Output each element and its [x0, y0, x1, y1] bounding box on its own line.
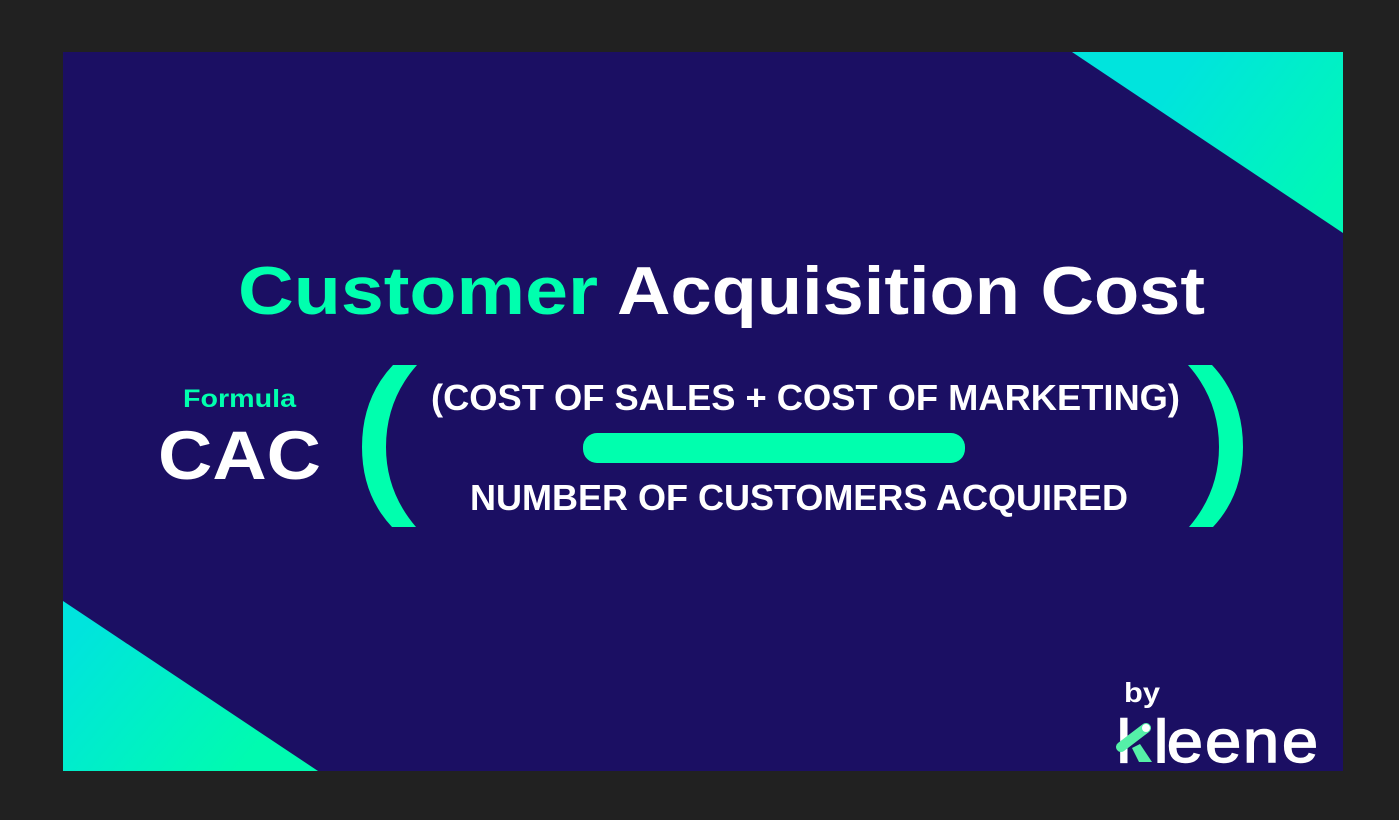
left bracket: [362, 365, 417, 527]
formula label: Formula: [183, 385, 297, 413]
decorative triangle: top right: [1072, 52, 1343, 233]
title: [238, 253, 1205, 329]
by label: by: [1124, 677, 1160, 708]
title: Customer: [238, 253, 598, 329]
CAC abbreviation: CAC: [158, 417, 321, 494]
title: Acquisition Cost: [617, 253, 1205, 329]
fraction bar: [583, 433, 965, 463]
right bracket: [1188, 365, 1243, 527]
denominator: NUMBER OF CUSTOMERS ACQUIRED: [470, 477, 1128, 518]
formula equation: [362, 365, 1243, 527]
logo: kleene: kleene: [1117, 708, 1318, 775]
decorative triangle: bottom left: [63, 601, 318, 771]
numerator: (COST OF SALES + COST OF MARKETING): [431, 377, 1180, 418]
logo mark: green strokes: [1121, 715, 1152, 764]
